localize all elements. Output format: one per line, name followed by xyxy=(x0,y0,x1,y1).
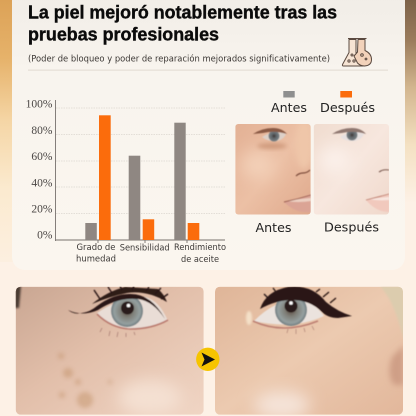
bottom band xyxy=(0,262,416,416)
label: después: Después xyxy=(324,220,379,234)
bars: grado de humedad xyxy=(85,115,111,240)
photo: eye before xyxy=(15,286,204,416)
photo: nose after xyxy=(314,124,389,214)
left background strip xyxy=(0,0,14,290)
chart category labels: Grado de xyxy=(76,242,116,252)
chart category labels xyxy=(76,242,226,264)
chart category labels: humedad xyxy=(76,254,116,264)
photo: nose before xyxy=(235,121,313,214)
title: pruebas profesionales xyxy=(28,24,219,44)
bar chart xyxy=(26,98,226,264)
chart category labels: Rendimiento xyxy=(174,242,226,252)
chart y axis labels: 0% xyxy=(37,230,53,242)
legend: antes: Antes xyxy=(271,100,307,115)
subtitle: (Poder de bloqueo y poder de reparación mejorados significativamente) xyxy=(28,54,330,64)
chart y axis labels: 60% xyxy=(31,151,53,163)
label: antes: Antes xyxy=(256,220,292,235)
chart category labels: de aceite xyxy=(181,254,219,264)
icon: lab flasks xyxy=(342,38,372,66)
chart y axis labels xyxy=(26,98,53,242)
chart category labels: Sensibilidad xyxy=(120,242,170,252)
bars: sensibilidad xyxy=(129,156,154,240)
title: La piel mejoró notablemente tras las xyxy=(28,2,337,22)
panel: results card xyxy=(12,0,405,270)
photo: eye after xyxy=(215,286,404,416)
title xyxy=(28,2,337,44)
chart y axis labels: 80% xyxy=(31,125,53,137)
chart y axis labels: 40% xyxy=(31,178,53,190)
bars: rendimiento de aceite xyxy=(174,123,199,240)
icon: arrow badge xyxy=(196,348,220,371)
chart legend xyxy=(271,91,375,115)
legend: después: Después xyxy=(320,100,375,115)
chart gridlines xyxy=(56,108,225,214)
chart y axis labels: 20% xyxy=(31,204,53,216)
right background strip xyxy=(402,0,416,290)
divider xyxy=(28,69,388,72)
photo labels xyxy=(256,220,379,235)
chart y axis labels: 100% xyxy=(26,98,53,110)
chart axes xyxy=(56,100,225,243)
